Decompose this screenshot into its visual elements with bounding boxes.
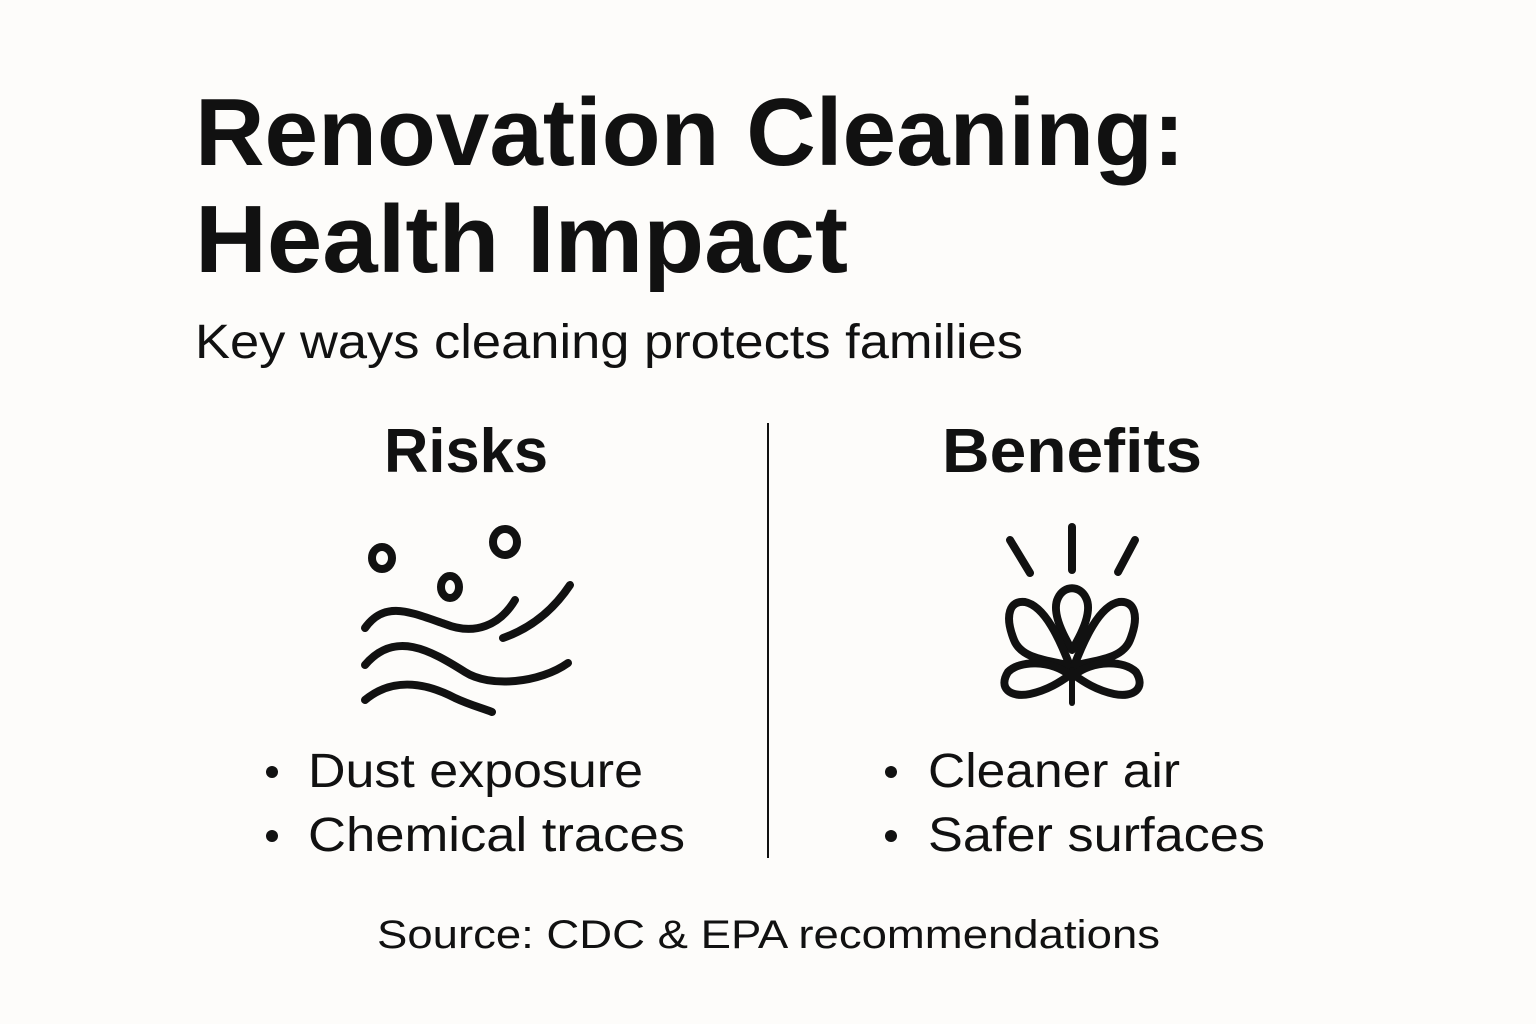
icon: clean flower: [1004, 527, 1140, 703]
source note: Source: CDC & EPA recommendations: [377, 913, 1160, 957]
title: Renovation Cleaning:: [195, 79, 1185, 186]
risk list: [266, 745, 685, 862]
subtitle: Key ways cleaning protects families: [195, 316, 1023, 369]
risk list: Chemical traces: [308, 809, 685, 862]
benefit list: [885, 745, 1265, 862]
heading: benefits: Benefits: [942, 417, 1202, 486]
heading: risks: Risks: [384, 417, 548, 486]
panel: risks: [266, 417, 685, 862]
divider: [767, 423, 769, 858]
benefit list: Safer surfaces: [928, 809, 1265, 862]
panel: benefits: [885, 417, 1265, 862]
icon: dust: [365, 529, 570, 712]
risk list: Dust exposure: [308, 745, 643, 798]
benefit list: Cleaner air: [928, 745, 1180, 798]
title: [195, 79, 1185, 293]
title: Health Impact: [195, 186, 848, 293]
